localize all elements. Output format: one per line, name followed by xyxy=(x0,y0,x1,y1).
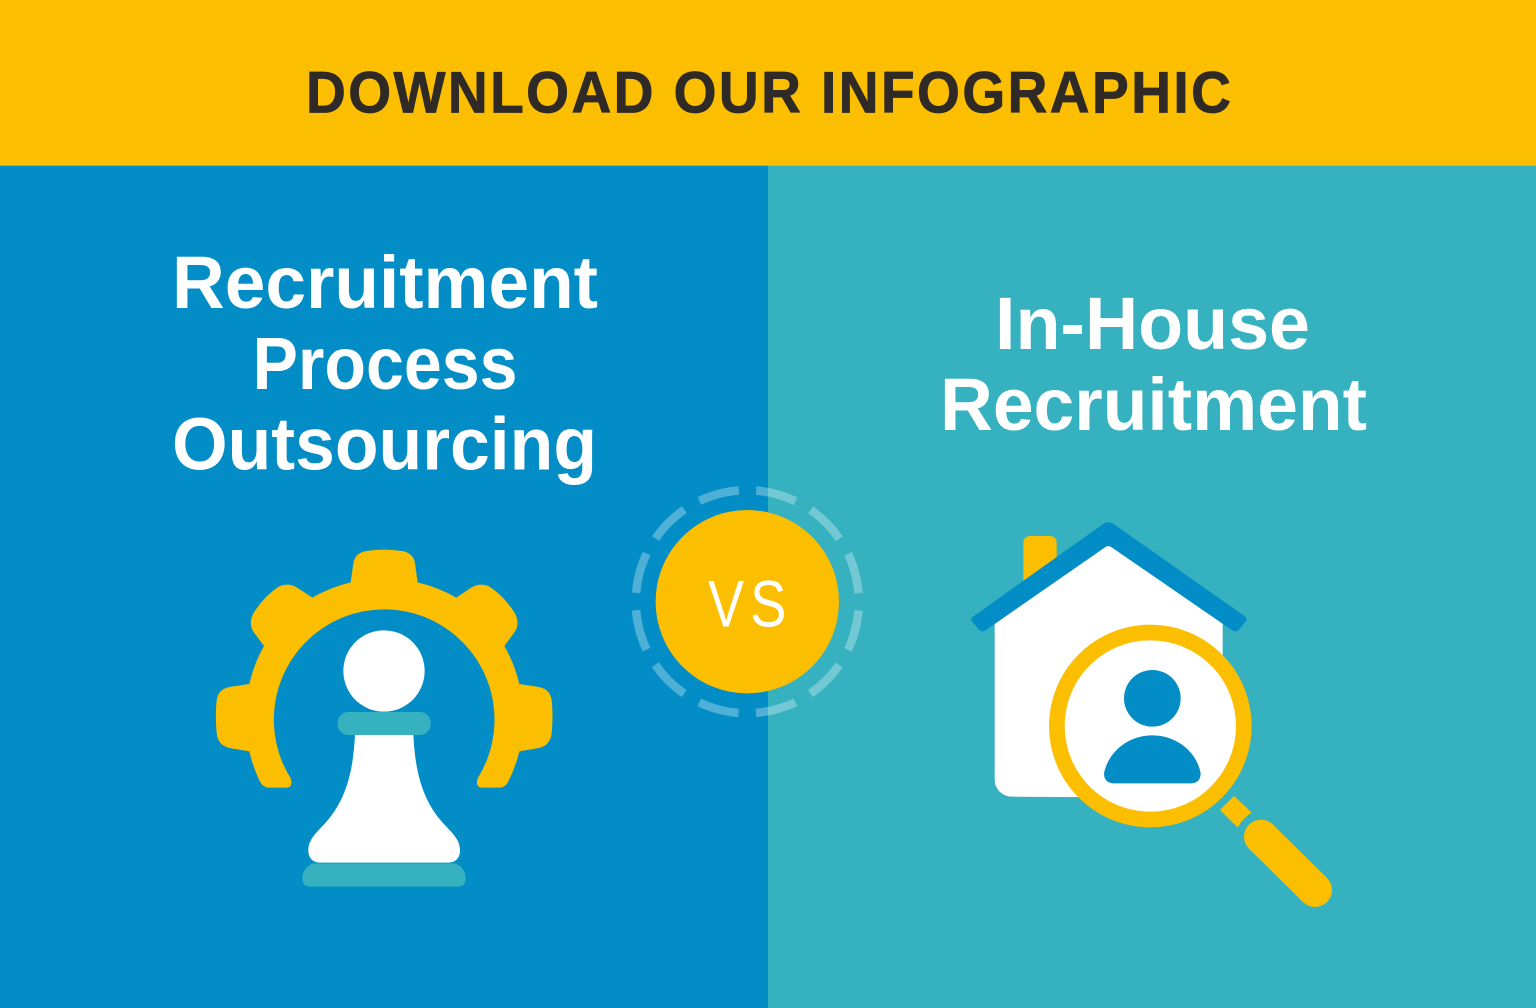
icon: house with magnifying glass and person xyxy=(971,522,1315,890)
title: DOWNLOAD OUR INFOGRAPHIC xyxy=(306,60,1233,125)
pawn body xyxy=(308,734,460,863)
panel: recruitment process outsourcing background xyxy=(0,165,768,1008)
vs badge xyxy=(636,490,859,713)
pawn head xyxy=(343,630,425,712)
heading: in-house recruitment: Recruitment xyxy=(940,363,1367,446)
heading: recruitment process outsourcing: Process xyxy=(252,322,518,405)
magnifier handle xyxy=(1261,837,1315,890)
heading: in-house recruitment xyxy=(940,282,1367,446)
magnifier lens xyxy=(1057,632,1244,819)
magnifier neck xyxy=(1220,796,1252,828)
vs badge: V xyxy=(708,566,744,641)
pawn base xyxy=(302,863,466,887)
heading: in-house recruitment: In-House xyxy=(995,282,1310,365)
heading: recruitment process outsourcing xyxy=(172,241,598,486)
gear arc xyxy=(216,550,552,788)
heading: recruitment process outsourcing: Outsourcing xyxy=(172,402,597,486)
pawn collar xyxy=(338,712,431,735)
heading: recruitment process outsourcing: Recruitment xyxy=(172,241,598,324)
person shoulders xyxy=(1104,735,1201,783)
person head xyxy=(1124,670,1181,727)
panel: in-house recruitment background xyxy=(768,165,1536,1008)
vs badge: S xyxy=(750,566,786,641)
banner: yellow header band xyxy=(0,0,1536,166)
house body xyxy=(995,543,1223,797)
roof xyxy=(971,522,1247,631)
chimney xyxy=(1023,536,1057,582)
icon: gear with chess pawn xyxy=(216,550,552,887)
